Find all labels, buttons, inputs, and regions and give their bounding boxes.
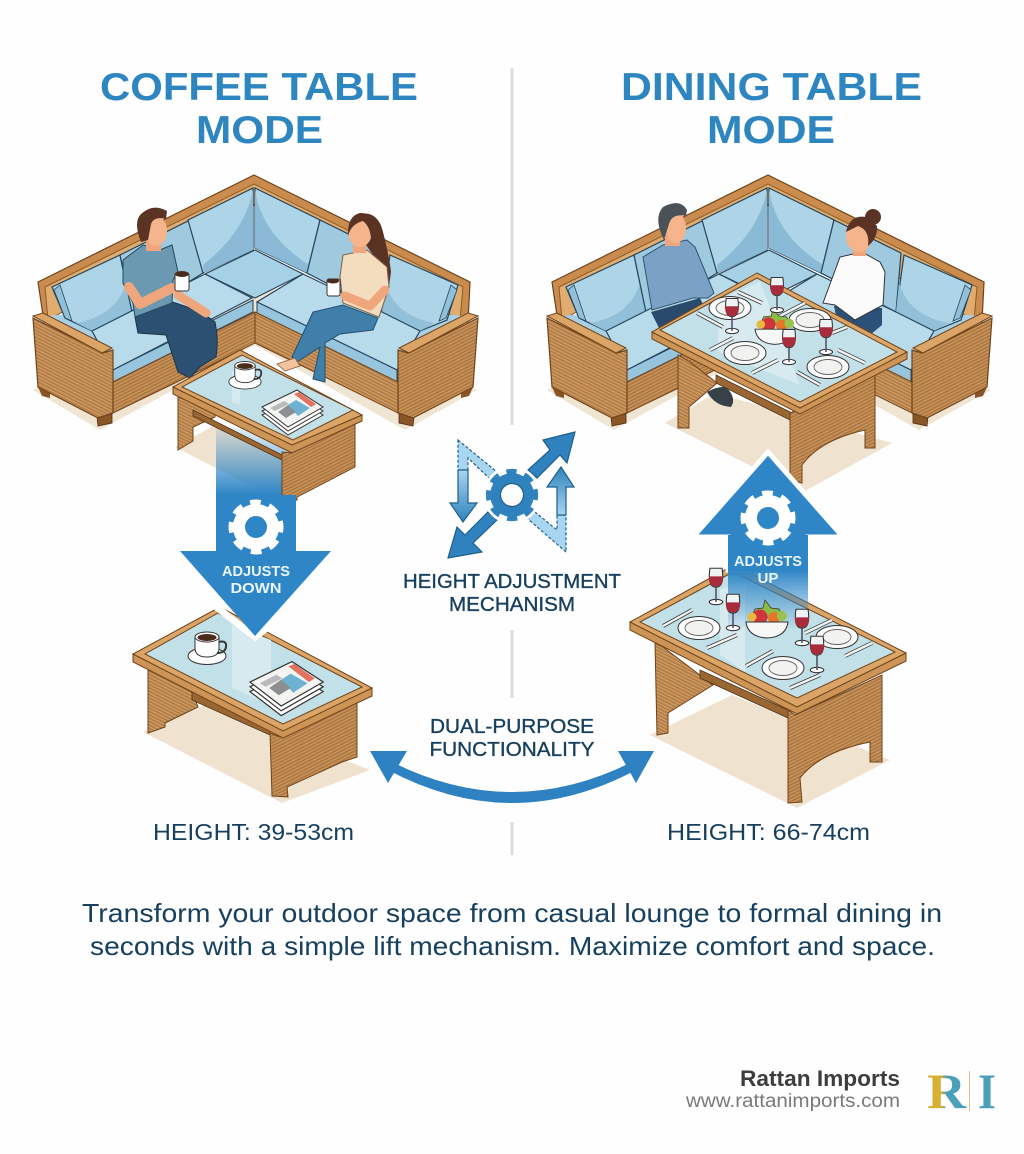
- coffee table: upper: [173, 350, 362, 503]
- dining table: lower: [630, 565, 906, 803]
- coffee table: lower: [133, 607, 372, 797]
- label: adjusts up: ADJUSTS: [734, 553, 802, 570]
- title: dining table mode: [621, 66, 922, 152]
- description text: Transform your outdoor space from casual lounge to formal dining in: [82, 898, 942, 928]
- brand name and url: www.rattanimports.com: [685, 1091, 900, 1112]
- center divider: [510, 68, 514, 855]
- arrow: dual purpose curved: [370, 751, 654, 803]
- logo: RI monogram: I: [978, 1063, 996, 1119]
- label: adjusts up: [734, 553, 802, 587]
- title: coffee table mode: MODE: [196, 109, 323, 152]
- arrow: adjusts up: [693, 452, 843, 628]
- label: adjusts down: ADJUSTS: [222, 563, 290, 580]
- icon: height adjustment mechanism: [448, 432, 575, 558]
- dining table settings: [663, 568, 872, 688]
- floor shadow: lower dining table: [650, 695, 890, 808]
- man's shoe: [707, 387, 733, 407]
- floor shadow: dining table: [665, 393, 892, 492]
- label: coffee table height: HEIGHT: 39-53cm: [153, 819, 354, 845]
- label: dual-purpose functionality: FUNCTIONALITY: [430, 738, 595, 761]
- person: woman with coffee: [277, 213, 391, 382]
- logo: RI monogram: [927, 1063, 996, 1119]
- title: dining table mode: MODE: [707, 109, 835, 152]
- dining table: upper: [652, 273, 907, 483]
- illustration: right rattan sofa: [547, 175, 992, 430]
- icon: gear down: [232, 503, 280, 551]
- illustration: left rattan sofa: [33, 175, 478, 430]
- label: dual-purpose functionality: DUAL-PURPOSE: [430, 715, 594, 738]
- title: coffee table mode: [100, 66, 418, 152]
- title: coffee table mode: COFFEE TABLE: [100, 66, 418, 109]
- title: dining table mode: DINING TABLE: [621, 66, 922, 109]
- icon: gear up: [744, 494, 792, 542]
- label: adjusts down: DOWN: [230, 580, 282, 597]
- label: adjusts up: UP: [758, 570, 778, 587]
- arrow head: adjusts down: [180, 495, 331, 637]
- brand name and url: [685, 1066, 900, 1112]
- floor shadow: lower coffee table: [143, 705, 370, 803]
- person: man with coffee: [123, 208, 217, 378]
- arrow: adjusts down: [216, 428, 296, 552]
- label: dining table height: HEIGHT: 66-74cm: [667, 819, 870, 845]
- logo: RI monogram: R: [927, 1063, 967, 1119]
- label: height adjustment mechanism: MECHANISM: [449, 594, 575, 616]
- brand name and url: Rattan Imports: [740, 1066, 900, 1091]
- description text: [82, 898, 942, 961]
- label: dual-purpose functionality: [430, 715, 595, 761]
- description text: seconds with a simple lift mechanism. Maximize comfort and space.: [90, 931, 935, 961]
- person: woman in white top: [823, 209, 885, 335]
- label: height adjustment mechanism: [403, 571, 621, 616]
- label: height adjustment mechanism: HEIGHT ADJUSTMENT: [403, 571, 621, 593]
- label: adjusts down: [222, 563, 290, 597]
- floor shadow: coffee table: [175, 425, 300, 506]
- person: man in sweater: [643, 203, 714, 330]
